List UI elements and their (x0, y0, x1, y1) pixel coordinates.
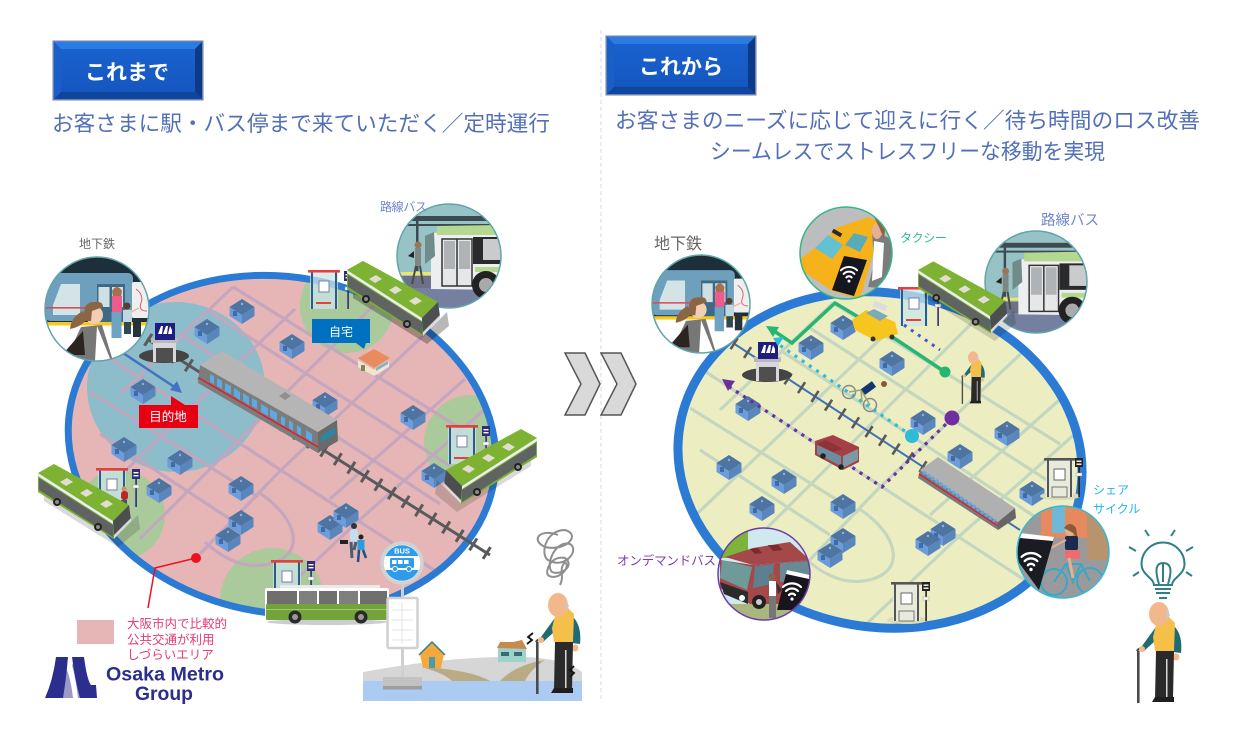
bus: bottom, side view (265, 585, 389, 625)
railway (733, 343, 1020, 530)
label: 目的地 (139, 396, 198, 428)
bus (918, 261, 1016, 341)
circle: route bus (985, 231, 1091, 335)
bus: bottom left (38, 464, 140, 547)
road network (680, 303, 1085, 630)
coverage circles: bus stops (88, 282, 492, 608)
station (139, 323, 189, 363)
label: 目的地: 目的地 (149, 409, 187, 424)
house: teal (497, 640, 527, 662)
icon: lightbulb (1129, 530, 1193, 598)
cyclist (842, 381, 887, 412)
legend text: 公共交通が利用 (127, 632, 215, 647)
legend text: 大阪市内で比較的 (127, 616, 227, 631)
button: これまで (52, 40, 204, 100)
bus: right (435, 429, 537, 512)
label: 自宅: 自宅 (329, 325, 353, 339)
bus: top, in front of circle (347, 261, 449, 344)
ellipse ring (651, 260, 1109, 660)
route: dotted blue (904, 325, 940, 350)
area fill (41, 242, 523, 648)
scribble: frustration (538, 530, 573, 585)
house: orange (419, 642, 445, 668)
subtitle: left: お客さまに駅・バス停まで来ていただく／定時運行 (52, 111, 550, 136)
road network (80, 287, 485, 614)
label: route bus: 路線バス (1041, 212, 1099, 229)
circle: subway (45, 257, 150, 366)
label: share cycle: シェア (1093, 483, 1129, 497)
label: 自宅 (312, 319, 370, 349)
bus stop: coloured (898, 287, 942, 326)
arrow: to destination (123, 353, 182, 393)
train (198, 351, 338, 453)
bus stop sign: BUS (394, 546, 410, 556)
houses (112, 299, 446, 552)
circle: subway (652, 255, 751, 357)
person at stop (121, 486, 128, 506)
legend swatch (77, 620, 114, 644)
home house (358, 349, 390, 376)
label: route bus: 路線バス (380, 199, 427, 214)
logo: Osaka Metro Group: Group (135, 684, 193, 705)
houses (716, 315, 1044, 568)
circle: share cycle (1017, 506, 1109, 598)
label: on-demand bus: オンデマンドバス (617, 553, 716, 568)
circle: on-demand bus (718, 528, 810, 622)
logo: Osaka Metro Group: Osaka Metro (106, 664, 224, 686)
taxi (852, 301, 898, 342)
route: purple on-demand (722, 379, 960, 487)
label: share cycle: サイクル (1093, 502, 1140, 516)
bus stops (96, 270, 490, 599)
divider (600, 30, 602, 700)
arrow: chevrons (565, 353, 636, 415)
button: これから: これから (639, 56, 723, 79)
scene: hills and houses (363, 640, 582, 701)
callout: red leader line (148, 553, 201, 608)
subtitle: right: お客さまのニーズに応じて迎えに行く／待ち時間のロス改善 (615, 108, 1200, 133)
button: これまで: これまで (85, 62, 169, 84)
coverage circle: subway (87, 302, 265, 472)
on-demand bus (815, 435, 859, 470)
circle: route bus (397, 204, 505, 310)
subtitle: right: シームレスでストレスフリーな移動を実現 (710, 139, 1105, 164)
ellipse ring (41, 242, 523, 648)
person: elderly, waiting (536, 593, 580, 694)
legend text: しづらいエリア (127, 648, 214, 662)
bus: top (347, 261, 449, 344)
label: taxi: タクシー (900, 231, 947, 245)
button: これから (606, 36, 756, 96)
subtitle: right (615, 108, 1200, 164)
legend text (127, 616, 227, 662)
train (918, 457, 1016, 530)
bus stop sign (382, 543, 422, 690)
circle: taxi (800, 207, 892, 299)
panel: right map (これから) (651, 207, 1109, 660)
label: subway: 地下鉄 (654, 235, 702, 253)
railway (147, 339, 490, 555)
panel: left map (これまで) (38, 204, 537, 652)
logo: Osaka Metro Group (45, 657, 224, 705)
route: green taxi (766, 303, 950, 378)
bus stops: gray (887, 458, 1083, 624)
label: share cycle (1093, 483, 1140, 516)
area fill (651, 260, 1109, 660)
route: cyan share cycle (773, 337, 919, 443)
person: elderly, with idea (1137, 602, 1181, 703)
station (742, 342, 792, 382)
annoyance marks (527, 633, 574, 677)
person: elderly, small (962, 351, 985, 404)
label: subway: 地下鉄 (79, 236, 115, 251)
pedestrians (340, 523, 366, 562)
